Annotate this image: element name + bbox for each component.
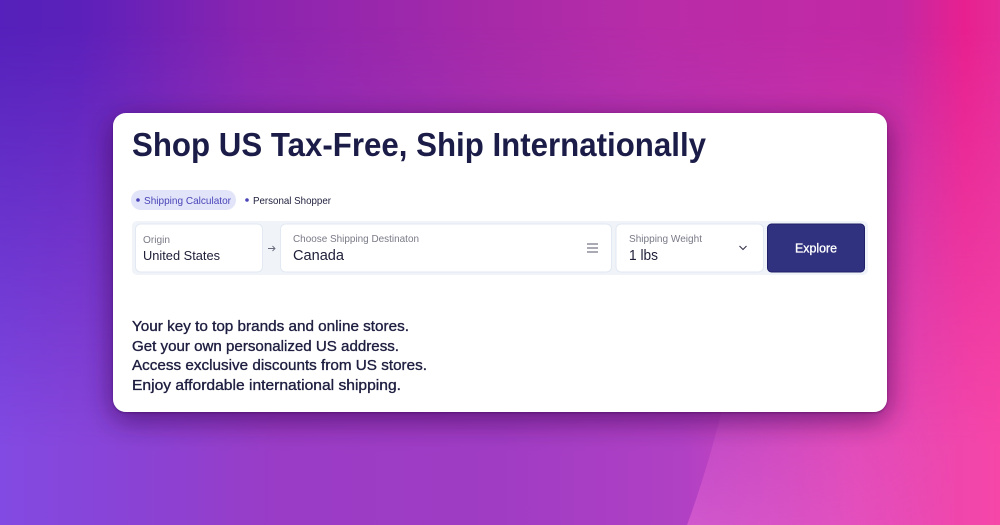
field: shipping weight: Shipping Weight: [629, 233, 702, 245]
benefits text block: Enjoy affordable international shipping.: [132, 377, 401, 394]
panel: white card: [113, 113, 887, 412]
icon: menu lines: [587, 244, 598, 252]
search bar: [132, 221, 868, 275]
field: shipping weight: 1 lbs: [629, 248, 658, 264]
benefits text block: Access exclusive discounts from US stores.: [132, 357, 427, 374]
field: shipping destination: [280, 224, 612, 272]
benefits text block: Your key to top brands and online stores.: [132, 318, 409, 335]
field: origin: [136, 224, 262, 272]
icon: arrow: [268, 246, 275, 251]
benefits text block: Get your own personalized US address.: [132, 338, 399, 355]
field: shipping weight: [616, 224, 764, 272]
field: shipping destination: Choose Shipping Destinaton: [293, 233, 419, 245]
tab: Shipping Calculator (active): [131, 190, 236, 210]
field: origin: Origin: [143, 234, 170, 246]
tab: Shipping Calculator (active): Shipping Calculator: [144, 195, 231, 207]
field: shipping destination: Canada: [293, 248, 345, 264]
field: origin: United States: [143, 248, 220, 263]
title: Shop US Tax-Free, Ship Internationally: [132, 126, 707, 163]
tab: Personal Shopper: Personal Shopper: [253, 195, 331, 207]
benefits text block: [132, 318, 427, 394]
icon: chevron: [740, 246, 746, 250]
button: explore: [768, 224, 864, 272]
button: explore: Explore: [795, 240, 837, 256]
